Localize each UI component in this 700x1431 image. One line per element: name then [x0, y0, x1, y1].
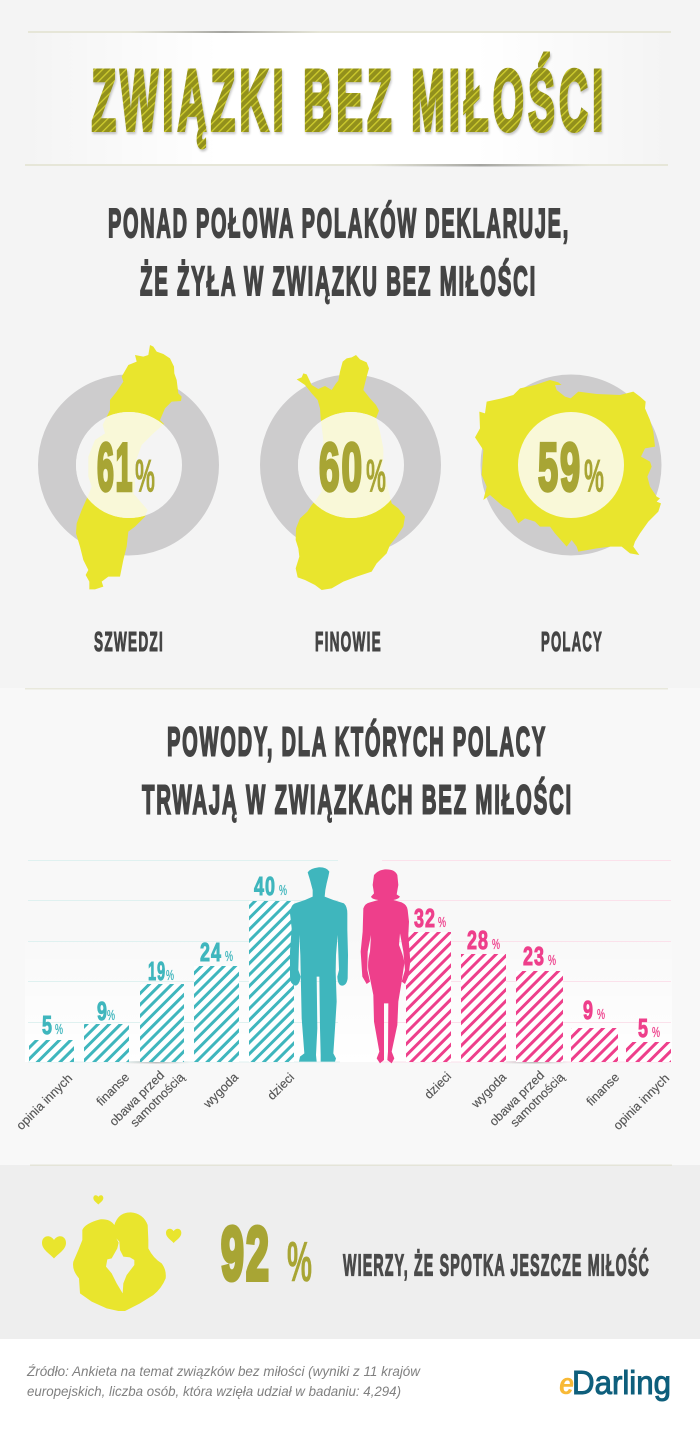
map: Szwecja: [76, 345, 182, 589]
values: teal series: 19: [148, 956, 166, 986]
values: pink series: %: [548, 952, 556, 969]
values: teal series: 9: [97, 996, 108, 1026]
source note: Źródło: Ankieta na temat związków bez miłości (wyniki z 11 krajów: [26, 1363, 421, 1379]
category labels: left: [14, 1068, 297, 1133]
values: teal series: %: [225, 948, 233, 965]
values: teal series: 40: [254, 871, 276, 901]
panel: Polacy 59%: [475, 374, 662, 657]
panel: Finowie 60%: [279, 355, 422, 657]
heading: ponad połowa: [108, 200, 570, 304]
category labels: right: opinia innych: [611, 1071, 672, 1133]
bars: pink series: [406, 932, 671, 1062]
values: teal series: %: [166, 967, 174, 984]
map: Polska: [475, 380, 661, 555]
heading: powody: [142, 718, 573, 822]
panel: 92%: [42, 1195, 650, 1311]
category labels: right: obawa przed: [487, 1068, 547, 1129]
category labels: left: finanse: [94, 1070, 132, 1109]
panel: Szwedzi 61%: %: [135, 450, 155, 502]
values: pink series: 28: [467, 925, 489, 955]
category labels: right: samotnością: [508, 1070, 567, 1130]
logo: eDarling: e: [559, 1366, 574, 1401]
values: pink series: 9: [583, 995, 594, 1025]
category labels: right: finanse: [584, 1070, 622, 1109]
values: teal series: [42, 871, 287, 1040]
values: pink series: 5: [638, 1013, 649, 1043]
values: pink series: %: [492, 936, 500, 953]
panel: Polacy 59%: POLACY: [541, 626, 603, 657]
values: teal series: 5: [42, 1010, 53, 1040]
value 92%: 92: [221, 1212, 271, 1296]
icon: man silhouette: [290, 867, 348, 1062]
values: pink series: %: [597, 1006, 605, 1023]
title banner: [25, 31, 671, 166]
values: pink series: %: [438, 914, 446, 931]
values: pink series: %: [652, 1024, 660, 1041]
chart: powody: [14, 860, 672, 1133]
icon: couple with hearts: [42, 1195, 181, 1311]
category labels: right: wygoda: [468, 1070, 509, 1111]
value 61%: 61: [97, 430, 134, 506]
panel: 92%: %: [287, 1230, 312, 1294]
value 59%: 59: [538, 430, 582, 506]
values: pink series: 23: [523, 941, 545, 971]
category labels: left: obawa przed: [107, 1068, 167, 1129]
category labels: right: dzieci: [422, 1069, 454, 1102]
values: teal series: 24: [200, 937, 222, 967]
panel: Szwedzi 61%: SZWEDZI: [94, 626, 164, 657]
panel: Finowie 60%: FINOWIE: [315, 626, 382, 657]
values: pink series: [414, 903, 660, 1043]
map: Finlandia: [296, 355, 405, 590]
panel: Szwedzi 61%: [57, 345, 200, 657]
category labels: left: opinia innych: [14, 1071, 75, 1133]
values: teal series: %: [55, 1021, 63, 1038]
panel: Finowie 60%: %: [366, 450, 386, 502]
category labels: left: samotnością: [128, 1070, 187, 1130]
values: teal series: %: [279, 882, 287, 899]
source note: europejskich, liczba osób, która wzięła udział w badaniu: 4,294): [27, 1383, 401, 1399]
bars: teal series: [29, 901, 294, 1062]
values: pink series: 32: [414, 903, 436, 933]
category labels: left: wygoda: [200, 1070, 241, 1111]
values: teal series: %: [107, 1007, 115, 1024]
logo: eDarling: Darling: [572, 1364, 671, 1401]
panel: Polacy 59%: %: [584, 450, 604, 502]
source note: [26, 1363, 421, 1399]
category labels: right: [422, 1068, 672, 1133]
value 60%: 60: [319, 430, 364, 506]
icon: woman silhouette: [361, 869, 410, 1063]
category labels: left: dzieci: [265, 1070, 297, 1103]
